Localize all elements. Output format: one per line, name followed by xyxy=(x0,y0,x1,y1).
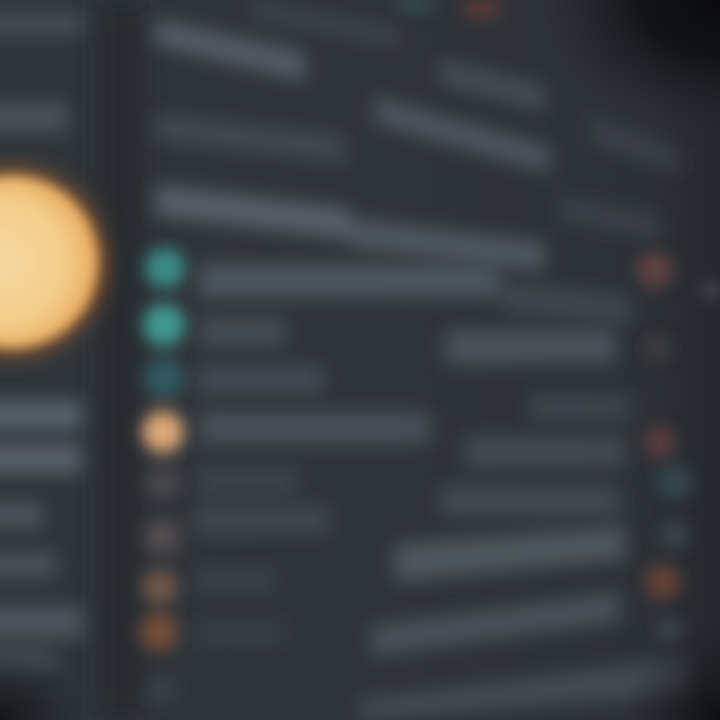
table rows: right values xyxy=(360,282,690,720)
headings: upper text rows xyxy=(155,0,680,272)
panel: sidebar column xyxy=(0,0,142,720)
icon: glowing yellow circle xyxy=(0,168,106,356)
table rows: left labels xyxy=(195,264,500,645)
row accent markers on right xyxy=(637,252,720,642)
status dots column xyxy=(140,248,185,705)
sidebar text blocks xyxy=(0,12,84,672)
top accent markers xyxy=(395,0,502,18)
